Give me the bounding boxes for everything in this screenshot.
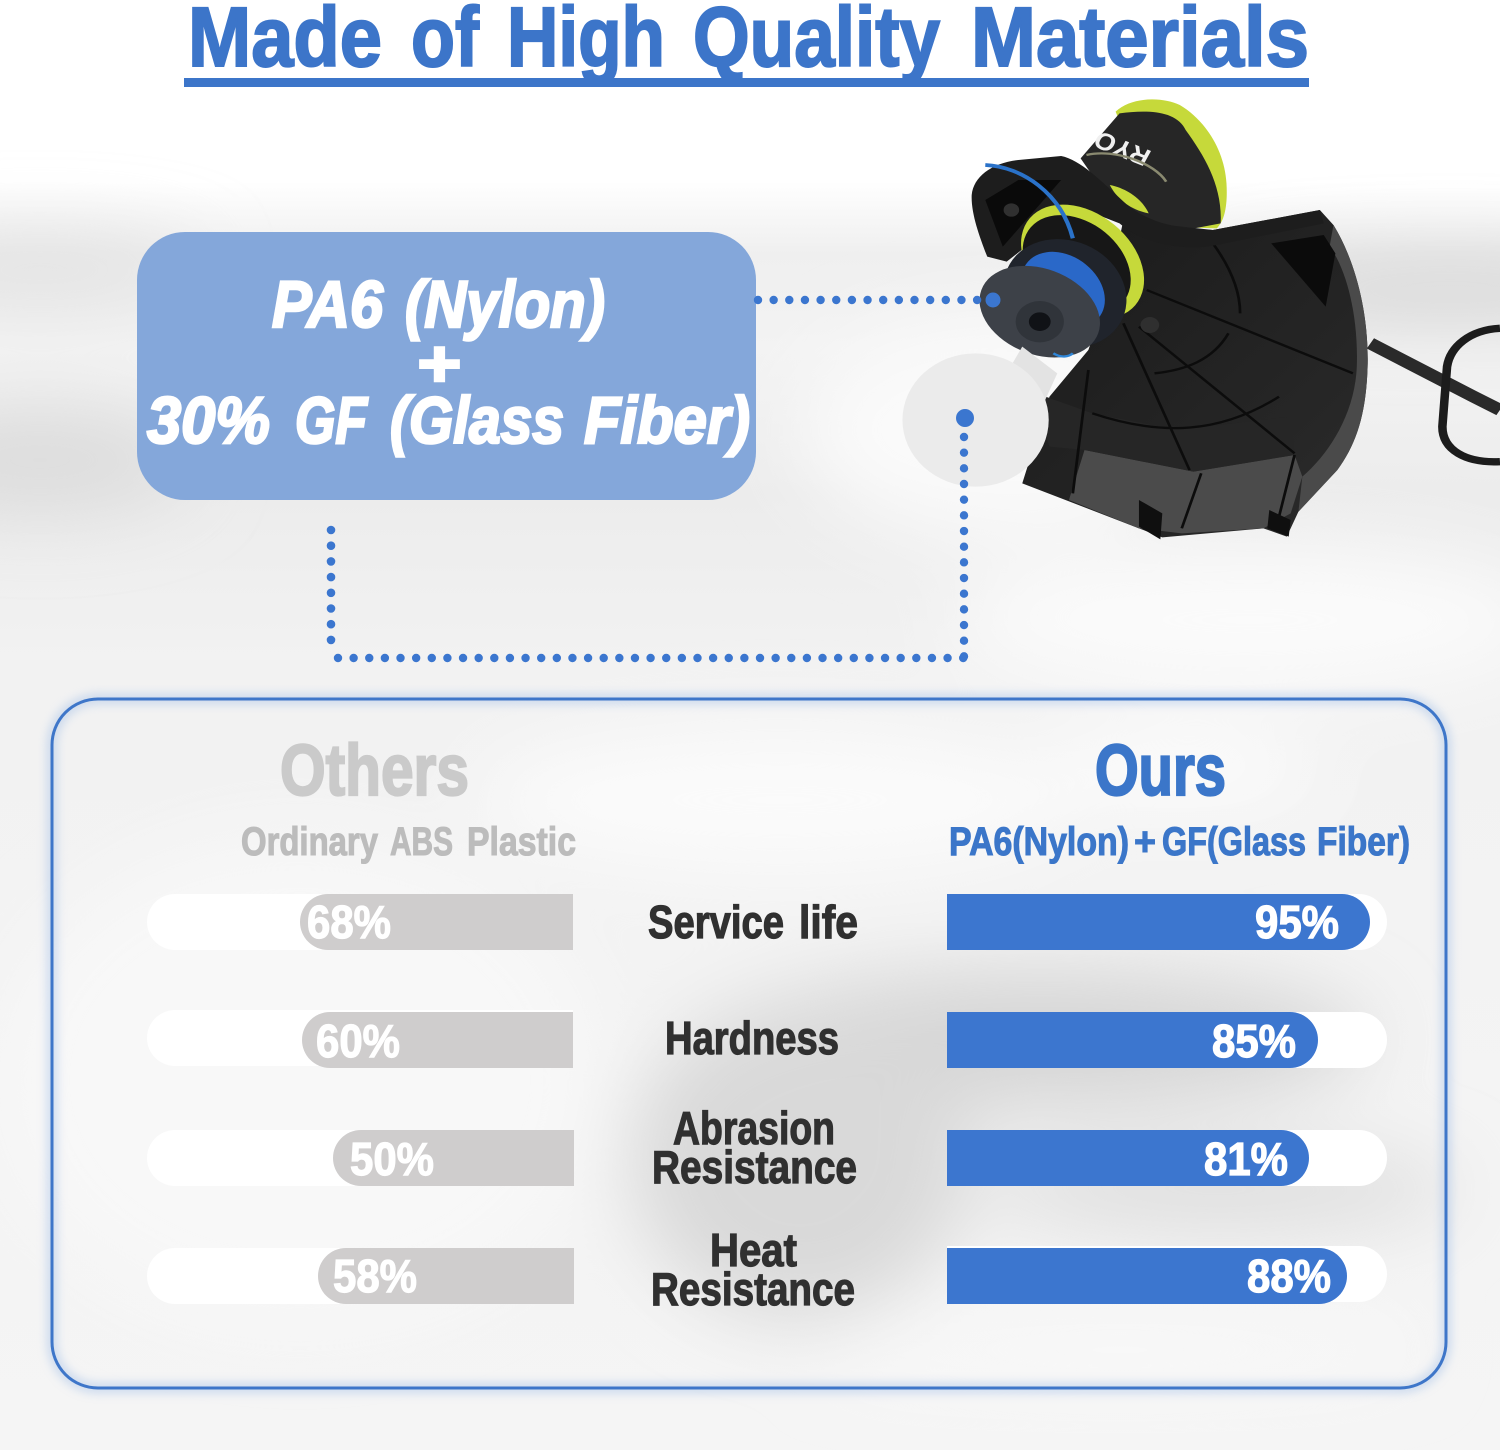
row: service life: 68% — [307, 896, 391, 948]
row: heat resistance: Heat — [710, 1224, 797, 1276]
row: heat resistance: 88% — [1247, 1250, 1331, 1302]
row: abrasion resistance — [147, 1102, 1387, 1193]
cap connector — [1007, 347, 1057, 403]
row: heat resistance: Resistance — [651, 1263, 855, 1315]
guard — [1022, 210, 1368, 537]
callout text: (Glass — [390, 383, 564, 457]
callout text: (Nylon) — [405, 267, 605, 341]
spool cap — [960, 247, 1120, 376]
row: heat resistance — [147, 1224, 1387, 1315]
callout text: + — [416, 326, 460, 400]
callout text: GF — [295, 383, 368, 457]
yellow housing — [1116, 99, 1227, 228]
row: service life: Service — [648, 896, 784, 948]
row: abrasion resistance: 81% — [1204, 1133, 1288, 1185]
column header: ours: + — [1134, 820, 1156, 864]
row: heat resistance: 58% — [333, 1250, 417, 1302]
motor housing — [1081, 112, 1221, 230]
row: service life: life — [799, 896, 858, 948]
column header: ours: GF(Glass — [1162, 820, 1306, 864]
row: service life: 95% — [1255, 896, 1339, 948]
row: service life — [147, 894, 1387, 950]
row: abrasion resistance: Resistance — [652, 1141, 857, 1193]
comparison panel — [52, 699, 1446, 1388]
glossy band — [1086, 153, 1166, 182]
row: hardness — [147, 1010, 1387, 1068]
callout text: PA6 — [272, 267, 384, 341]
blue line — [1004, 238, 1122, 342]
title — [184, 0, 1309, 87]
row: hardness: Hardness — [665, 1012, 839, 1064]
callout text: Fiber) — [584, 383, 750, 457]
feet — [1139, 500, 1291, 539]
row: abrasion resistance: 50% — [350, 1133, 434, 1185]
yellow ring — [996, 184, 1169, 339]
column header: ours — [949, 731, 1410, 864]
row: abrasion resistance: Abrasion — [673, 1102, 835, 1154]
brand label on motor: RYO — [1089, 126, 1155, 172]
icon: string trimmer head — [902, 99, 1500, 539]
white cap disc — [902, 353, 1049, 487]
trimmer shaft and handle — [1370, 328, 1500, 462]
yellow accent — [1110, 185, 1149, 213]
guard ribs — [1073, 243, 1353, 528]
column header: others — [241, 731, 576, 864]
connector: box to cap — [331, 410, 973, 658]
column header: ours: Fiber) — [1317, 820, 1410, 864]
guard vent — [1271, 235, 1335, 307]
spool — [978, 218, 1152, 369]
column header: others: ABS — [390, 820, 453, 864]
row: hardness: 60% — [316, 1015, 400, 1067]
column header: others: Ordinary — [241, 820, 379, 864]
connector: box to spool — [758, 294, 1000, 306]
callout box: material — [137, 232, 756, 500]
column header: others: Plastic — [467, 820, 576, 864]
column header: ours: PA6(Nylon) — [949, 820, 1129, 864]
callout text: 30% — [147, 383, 270, 457]
guard right edge — [1298, 225, 1368, 512]
bracket arm — [972, 156, 1324, 262]
guard lighter lip — [1069, 450, 1302, 533]
column header: others: Others — [280, 731, 469, 811]
row: hardness: 85% — [1212, 1015, 1296, 1067]
column header: ours: Ours — [1095, 731, 1226, 811]
callout text — [147, 267, 750, 457]
